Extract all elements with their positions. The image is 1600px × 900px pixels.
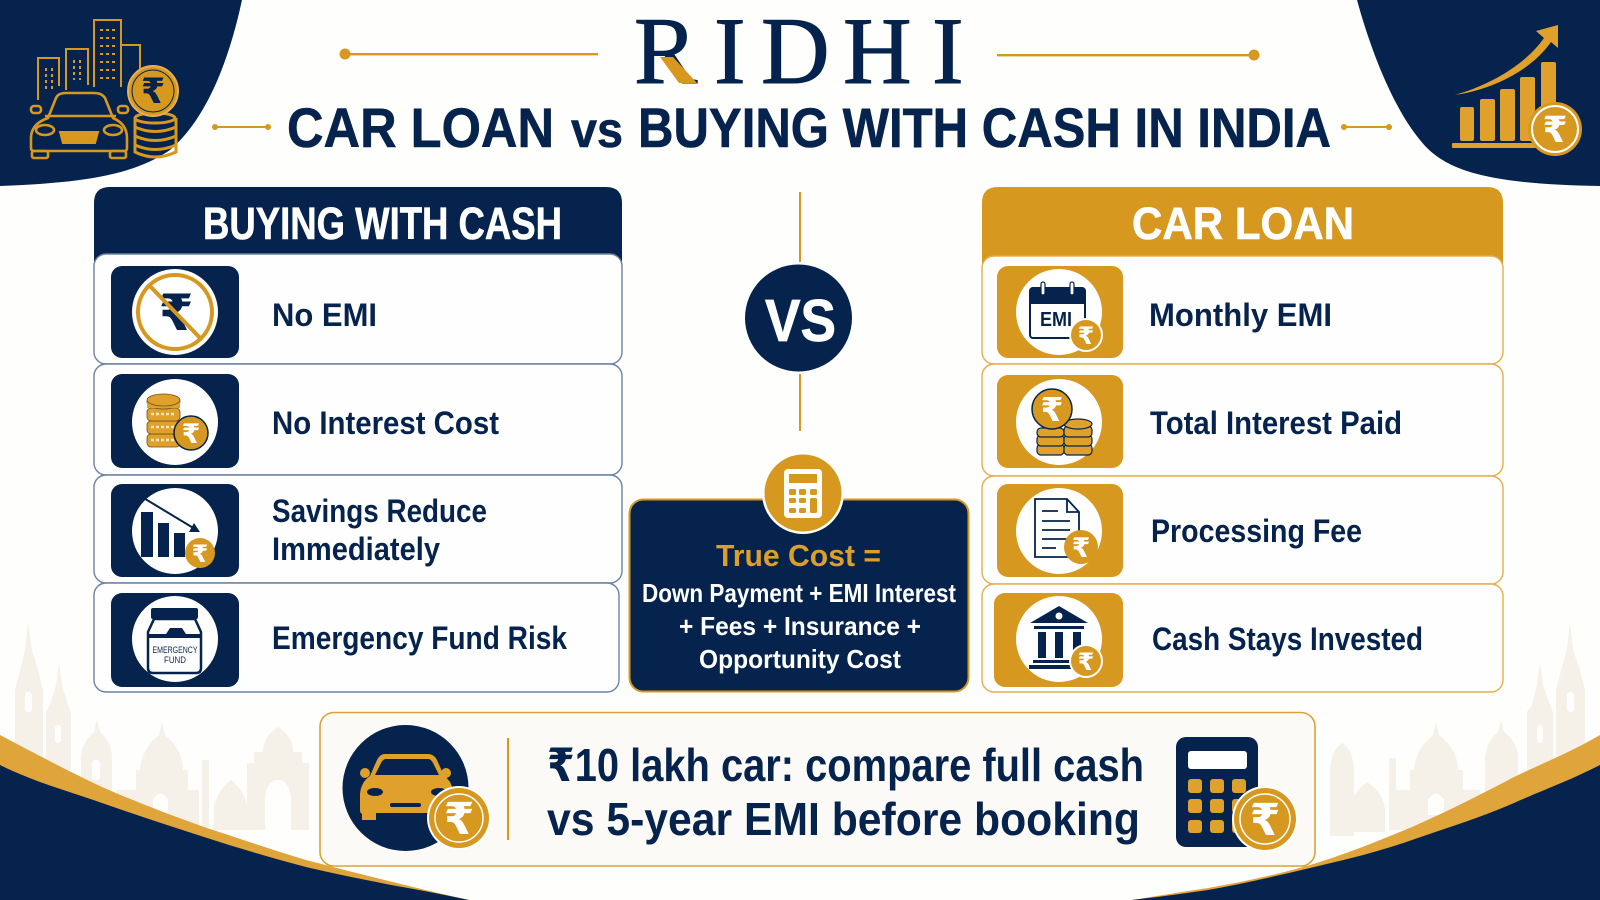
row: no EMI: ₹ — [159, 285, 193, 341]
row: emergency fund risk: Emergency Fund Risk — [272, 620, 567, 656]
row: processing fee: ₹ — [1072, 533, 1090, 563]
row: no EMI: No EMI — [272, 297, 377, 333]
row: processing fee — [982, 476, 1503, 584]
row: monthly EMI: Monthly EMI — [1149, 297, 1332, 333]
true cost heading: True Cost = — [716, 538, 881, 573]
corner panel top right — [1357, 0, 1600, 186]
row: no interest cost: ₹ — [182, 419, 200, 449]
row: savings reduce: ₹ — [192, 541, 208, 568]
panel: buying with cash — [94, 187, 622, 692]
icon: calculator with rupee coin: ₹ — [1250, 796, 1280, 845]
row: total interest paid: ₹ — [1041, 391, 1063, 428]
row: monthly EMI: EMI — [1040, 309, 1072, 331]
icon: growth chart and coin — [1452, 25, 1582, 156]
callout text: ₹10 lakh car: compare full cash — [547, 739, 1144, 791]
icon: calculator with rupee coin — [1176, 737, 1298, 852]
true cost formula — [642, 578, 956, 674]
row: total interest paid: Total Interest Paid — [1150, 405, 1402, 441]
header: car loan — [982, 187, 1503, 270]
row: savings reduce: Savings Reduce — [272, 493, 487, 529]
header: buying with cash: BUYING WITH CASH — [203, 198, 562, 249]
row: no interest cost: No Interest Cost — [272, 405, 499, 441]
callout text — [547, 739, 1144, 845]
header: buying with cash — [94, 187, 622, 270]
logo: RIDHI: RIDHI — [634, 0, 964, 104]
bottom wave left — [0, 735, 469, 900]
icon: city car and coins — [31, 20, 178, 158]
icon: city car and coins: ₹ — [141, 72, 165, 111]
row: cash stays invested — [982, 584, 1503, 692]
row: monthly EMI — [982, 256, 1503, 364]
title — [287, 96, 1331, 159]
row: savings reduce — [94, 475, 622, 583]
true cost formula: + Fees + Insurance + — [679, 611, 921, 641]
row: monthly EMI: ₹ — [1078, 323, 1094, 350]
icon: car with rupee coin — [342, 725, 491, 851]
panel: true cost — [630, 452, 968, 692]
row: total interest paid — [982, 364, 1503, 476]
divider — [507, 738, 509, 840]
row: no EMI — [94, 254, 622, 364]
divider lines around VS — [799, 192, 801, 431]
panel: car loan — [982, 187, 1503, 692]
icon: car with rupee coin: ₹ — [444, 795, 474, 844]
bottom wave right — [1132, 735, 1600, 900]
row: cash stays invested: ₹ — [1078, 649, 1094, 676]
row: savings reduce: Immediately — [272, 531, 440, 567]
true cost formula: Opportunity Cost — [699, 644, 901, 674]
icon: calculator — [762, 452, 844, 534]
title: BUYING WITH CASH IN INDIA — [638, 96, 1331, 159]
row: emergency fund risk: EMERGENCY — [152, 645, 198, 655]
callout: 10 lakh car — [320, 712, 1315, 866]
callout text: vs 5-year EMI before booking — [547, 793, 1140, 845]
header: car loan: CAR LOAN — [1132, 198, 1354, 249]
skyline silhouette left — [15, 622, 309, 830]
title: vs — [571, 102, 623, 158]
row: cash stays invested: Cash Stays Invested — [1152, 621, 1423, 657]
true cost formula: Down Payment + EMI Interest — [642, 578, 956, 608]
row: no interest cost — [94, 364, 622, 475]
title: CAR LOAN — [287, 96, 554, 159]
VS badge — [745, 264, 852, 372]
icon: growth chart and coin: ₹ — [1542, 109, 1568, 150]
row: emergency fund risk — [94, 583, 619, 692]
corner panel top left — [0, 0, 242, 186]
row: emergency fund risk: FUND — [164, 655, 186, 665]
decorative lines beside logo — [212, 48, 1392, 130]
row: processing fee: Processing Fee — [1151, 513, 1362, 549]
skyline silhouette right — [1330, 622, 1585, 836]
VS badge: VS — [765, 288, 836, 354]
